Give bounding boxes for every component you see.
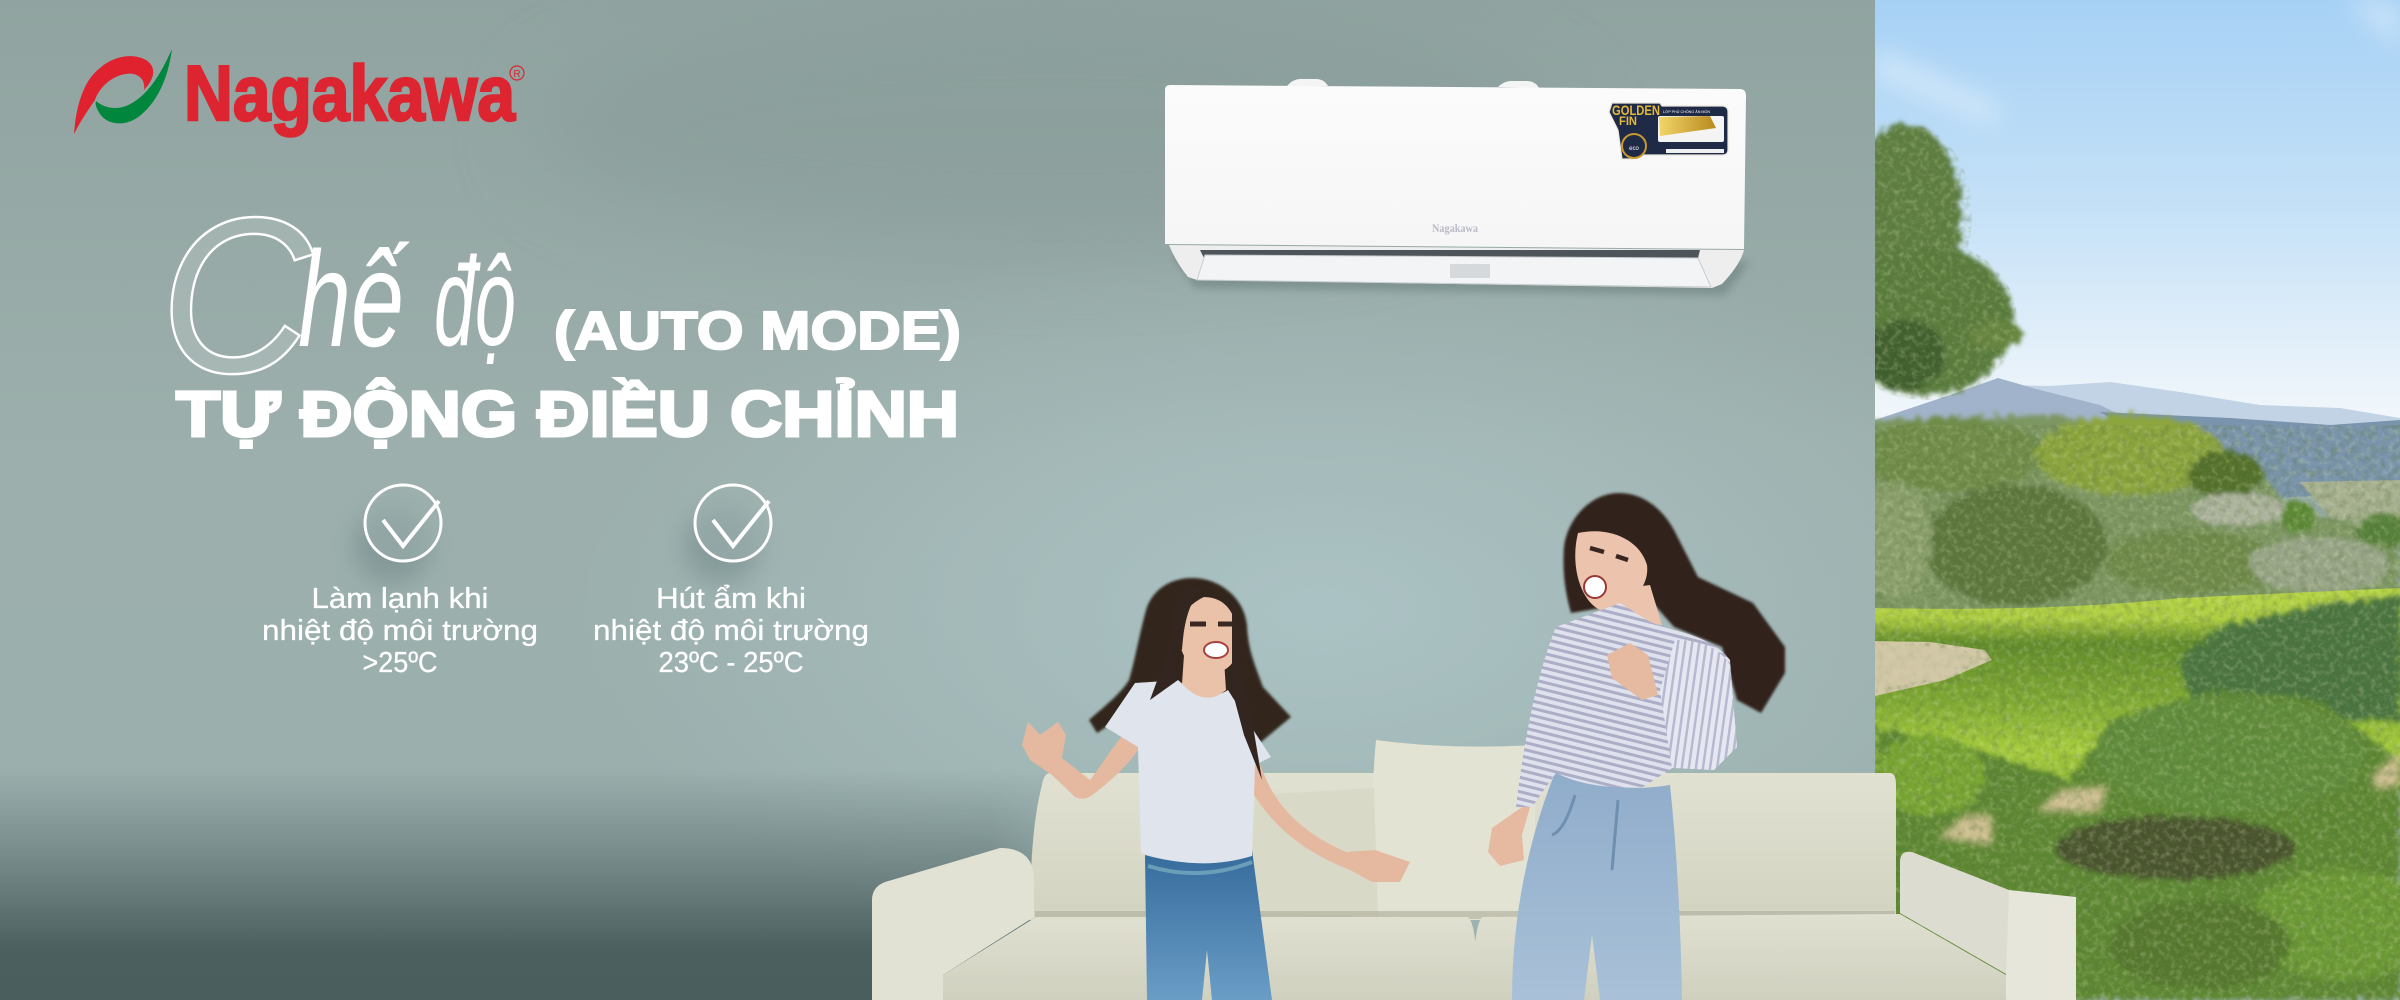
lower housing: [1169, 245, 1744, 288]
golden fin sticker: [1609, 102, 1728, 159]
mounting tabs: [1287, 79, 1539, 88]
clouds: [1875, 0, 2400, 125]
golden fin sticker: GOLDEN: [1612, 102, 1660, 118]
dark vent: [1200, 250, 1700, 258]
girl hair front: [1150, 586, 1262, 780]
woman smile: [1584, 576, 1606, 598]
dehumidifying text: Hút ẩm khi: [656, 583, 806, 615]
stone path: [1875, 641, 1992, 696]
cooling text: nhiệt độ môi trường: [262, 615, 538, 647]
wall shadow: [1172, 255, 1750, 295]
girl right arm and hand: [1245, 757, 1410, 882]
woman shirt: [1516, 603, 1737, 807]
golden fin sticker: FIN: [1619, 114, 1637, 128]
outdoor landscape: [1837, 0, 2400, 1000]
left seat cushion: [943, 917, 1477, 1000]
woman jeans: [1512, 770, 1682, 1000]
cooling text: [262, 583, 538, 679]
woman raised forearm: [1607, 643, 1658, 700]
feature: dehumidifying: [593, 485, 869, 679]
golden fin sticker: LỚP PHỦ CHỐNG ĂN MÒN: [1663, 109, 1710, 114]
script heading: C: [160, 172, 314, 420]
small pillow: [1250, 788, 1378, 917]
woman neck and face: [1575, 531, 1662, 630]
right arm inner face: [1900, 852, 2009, 982]
logo swoosh: [74, 49, 172, 134]
girl neck and face: [1179, 597, 1238, 698]
sandy patches: [1938, 752, 2400, 845]
script heading: [160, 172, 516, 420]
hillside trees: [1855, 415, 2400, 620]
back cushion large: [1372, 740, 1535, 920]
girl t-shirt: [1105, 680, 1271, 863]
girl left arm: [1022, 722, 1142, 799]
cooling text: Làm lạnh khi: [312, 583, 488, 615]
dehumidifying text: nhiệt độ môi trường: [593, 615, 869, 647]
feature: cooling: [262, 485, 538, 679]
distant mountains: [1875, 378, 2400, 530]
cooling text: >25ºC: [362, 647, 438, 679]
script heading: hế: [298, 223, 410, 375]
woman eyes: [1590, 548, 1628, 560]
woman: [1488, 493, 1785, 1000]
woman hair: [1563, 493, 1785, 713]
girl jeans: [1145, 850, 1272, 1000]
sky: [1875, 0, 2400, 420]
right seat cushion: [1474, 914, 2006, 1000]
girl eyes: [1190, 622, 1232, 626]
dehumidifying text: [593, 583, 869, 679]
girl hair back: [1089, 578, 1291, 747]
logo wordmark: Nagakawa: [184, 49, 516, 137]
sofa: [872, 740, 2076, 1000]
grass lawn: [1875, 588, 2400, 790]
tree: [1875, 118, 2028, 400]
girl smile: [1204, 642, 1228, 658]
woman left hand: [1488, 800, 1532, 866]
auto mode heading: (AUTO MODE): [554, 301, 961, 361]
shrubs: [1875, 595, 2400, 1000]
air conditioner: [1165, 79, 1750, 295]
sofa back: [1030, 773, 1896, 920]
stone overlay: [1875, 645, 1975, 690]
logo: Nagakawa: [74, 49, 524, 137]
center clip: [1450, 264, 1490, 278]
brand on casing: Nagakawa: [1432, 221, 1478, 235]
louver flap: [1197, 255, 1711, 287]
golden fin sticker: eco: [1629, 146, 1639, 152]
script heading: độ: [434, 231, 516, 372]
main heading: TỰ ĐỘNG ĐIỀU CHỈNH: [176, 377, 959, 450]
registered mark: [510, 66, 524, 80]
seat shadow: [1035, 911, 1895, 919]
girl: [1022, 578, 1410, 1000]
main casing: [1165, 85, 1746, 249]
woman sleeve: [1660, 640, 1737, 770]
right arm front face: [2006, 890, 2076, 1000]
dehumidifying text: 23ºC - 25ºC: [658, 647, 804, 679]
registered mark: R: [513, 69, 521, 80]
icon: check circle: [354, 485, 441, 584]
left arm: [872, 848, 1034, 1000]
title block: [160, 172, 961, 450]
icon: check circle: [684, 485, 771, 584]
foliage texture: [1875, 120, 2400, 1000]
